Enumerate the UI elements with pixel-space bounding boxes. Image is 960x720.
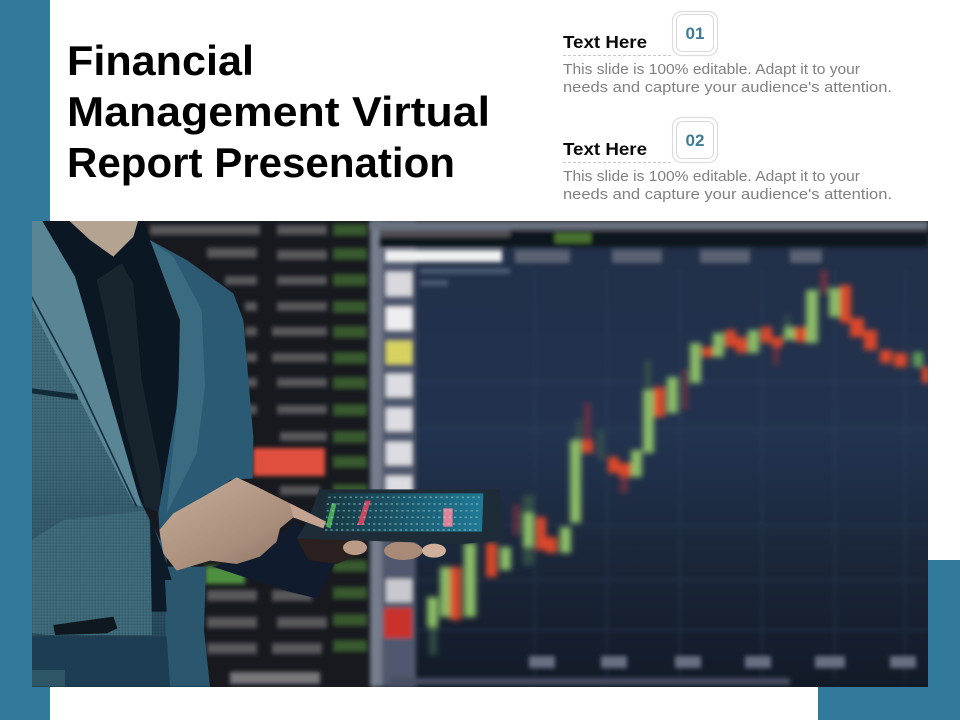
tablet bbox=[297, 489, 504, 544]
title: Financial bbox=[67, 37, 254, 84]
chart background bbox=[415, 235, 928, 687]
shirt bbox=[42, 220, 185, 510]
stock data board bbox=[150, 224, 367, 684]
shirt cuff bbox=[150, 517, 172, 612]
jacket right side bbox=[150, 240, 253, 687]
body text 01 bbox=[563, 62, 892, 96]
lower jacket shadow bbox=[32, 637, 170, 687]
lower jacket front bbox=[165, 567, 210, 687]
body text 02 bbox=[563, 169, 892, 203]
badge 02 bbox=[672, 118, 718, 162]
title: Management Virtual bbox=[67, 88, 490, 135]
far sleeve bbox=[213, 520, 335, 598]
title bbox=[67, 37, 490, 186]
fingertip bbox=[290, 503, 326, 528]
chart axis labels bbox=[390, 656, 916, 685]
body text 01: needs and capture your audience's attention. bbox=[563, 80, 892, 96]
pointing hand bbox=[159, 477, 326, 571]
heading 02: Text Here bbox=[563, 139, 647, 159]
chart top bars bbox=[370, 221, 928, 286]
heading 01: Text Here bbox=[563, 32, 647, 52]
sleeve bbox=[32, 511, 152, 635]
lapel left bbox=[32, 220, 142, 507]
text block 01 bbox=[563, 12, 892, 96]
photo: businessman using tablet in front of stock chart bbox=[30, 220, 930, 687]
title: Report Presenation bbox=[67, 139, 455, 186]
jacket left side bbox=[32, 308, 167, 687]
tie bbox=[97, 263, 161, 513]
body text 02: needs and capture your audience's attention. bbox=[563, 187, 892, 203]
teal bottom-right block bbox=[818, 560, 960, 720]
badge 01 bbox=[672, 12, 718, 56]
neck bbox=[68, 220, 138, 257]
badge 02: 02 bbox=[686, 131, 704, 150]
badge 01: 01 bbox=[686, 24, 704, 43]
body text 02: This slide is 100% editable. Adapt it to your bbox=[563, 169, 860, 185]
chart grid bbox=[532, 578, 908, 633]
green ticker cell bbox=[205, 566, 245, 584]
candlestick chart bbox=[427, 270, 930, 655]
red ticker cell bbox=[253, 448, 325, 476]
businessman bbox=[30, 220, 504, 687]
teal left bar bbox=[0, 0, 50, 720]
body text 01: This slide is 100% editable. Adapt it to your bbox=[563, 62, 860, 78]
holding hand bbox=[297, 538, 446, 564]
side toolbar bbox=[370, 221, 416, 687]
text block 02 bbox=[563, 118, 892, 203]
